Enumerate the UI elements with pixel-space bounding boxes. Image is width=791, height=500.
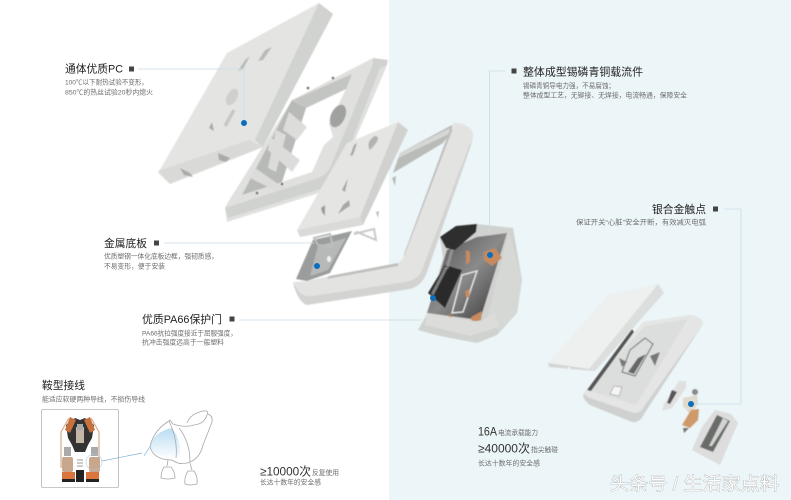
leader lines: [138, 69, 741, 404]
stat: 10000次: 长达十数年的安全感: [260, 478, 321, 486]
callout: 通体优质PC: 通体优质PC: [65, 62, 123, 76]
callout: 通体优质PC: 100℃以下耐热试验不变形，: [65, 78, 148, 86]
stat: 10000次: 反复使用: [312, 468, 339, 477]
callout: 优质PA66保护门: PA66抗拉强度接近于屈服强度，: [142, 328, 237, 338]
callout: 整体成型锡磷青铜载流件: 整体成型工艺，无铆接、无焊接，电流畅通，保障安全: [523, 90, 687, 100]
exploded part: silver contact assembly: [662, 381, 699, 433]
callout: 金属底板: 优质塑钢一体化底板边框，强韧质感，: [104, 252, 218, 260]
heading: 鞍型接线: [42, 378, 145, 404]
diagram: saddle wiring terminal box: [42, 410, 118, 488]
stat: 16A and 40000次: [478, 424, 558, 468]
connector arrow: terminal to saddle: [102, 453, 142, 461]
exploded part: inner frame: [225, 58, 388, 222]
callout: 银合金触点: 保证开关“心脏”安全开断，有效减灭电弧: [576, 218, 706, 226]
callout: 通体优质PC: [65, 62, 153, 96]
callout: 金属底板: 不易变形，便于安装: [104, 262, 165, 270]
heading: 鞍型接线: 能适应软硬两种导线，不损伤导线: [42, 394, 145, 404]
callout: 优质PA66保护门: [142, 312, 237, 346]
callout: 银合金触点: 银合金触点: [652, 202, 706, 216]
stat: 16A and 40000次: 指尖触碰: [531, 445, 558, 454]
callout: 通体优质PC: 850℃的热丝试验20秒内熄火: [65, 88, 153, 96]
callout: 银合金触点: [576, 202, 718, 226]
illustration: saddle: [144, 411, 212, 485]
callout: 整体成型锡磷青铜载流件: 锡磷青铜导电力强，不易腐蚀；: [523, 81, 615, 90]
exploded part: front cover plate: [158, 3, 333, 184]
exploded part: socket plate: [297, 122, 408, 247]
exploded part: rear base ring: [293, 123, 473, 305]
heading: 鞍型接线: 鞍型接线: [42, 378, 85, 392]
callout: 优质PA66保护门: 抗冲击强度远高于一般塑料: [142, 338, 224, 346]
callout: 金属底板: 金属底板: [104, 236, 147, 250]
stat: 16A and 40000次: ≥40000次: [478, 442, 530, 456]
callout: 整体成型锡磷青铜载流件: 整体成型锡磷青铜载流件: [523, 64, 643, 78]
callout: 优质PA66保护门: 优质PA66保护门: [142, 312, 222, 326]
callout: 整体成型锡磷青铜载流件: [512, 64, 687, 100]
watermark: 头条号 / 生活家点料: [610, 474, 779, 494]
stat: 16A and 40000次: 长达十数年的安全感: [478, 458, 540, 468]
callout: 金属底板: [104, 236, 218, 270]
stat: 10000次: [260, 464, 339, 486]
stat: 10000次: ≥10000次: [260, 464, 311, 478]
marker dots: [241, 120, 694, 407]
stat: 16A and 40000次: 16A: [478, 424, 497, 438]
exploded part: contact housing: [692, 410, 738, 465]
stat: 16A and 40000次: 电流承载能力: [498, 428, 538, 437]
exploded part: conductor module: [418, 224, 522, 343]
exploded part: rocker cover and tray: [548, 284, 703, 422]
